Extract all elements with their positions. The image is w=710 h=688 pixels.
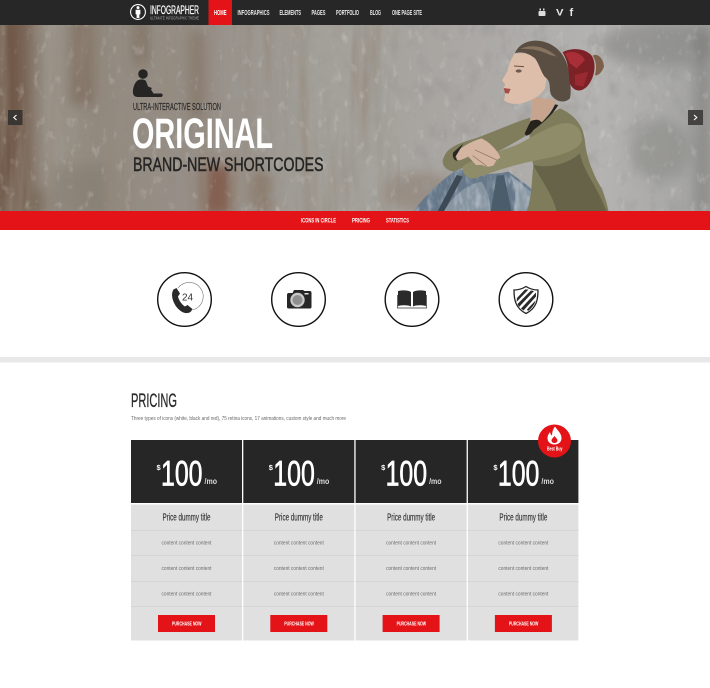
purchase button: PURCHASE NOW — [509, 622, 539, 628]
price: 100 — [386, 454, 427, 494]
logo tagline: ULTIMATE INFOGRAPHIC THEME — [150, 16, 199, 20]
hero left arrow — [8, 110, 22, 125]
plan title: Price dummy title — [275, 512, 323, 524]
pricing table column 3 — [356, 440, 467, 640]
price: $ — [381, 463, 386, 472]
purchase button: PURCHASE NOW — [284, 622, 314, 628]
rows — [356, 530, 467, 607]
pricing table column 4 — [468, 440, 578, 640]
price: $ — [269, 463, 274, 472]
icon: open book — [385, 273, 439, 326]
necklace — [525, 104, 558, 136]
icon: youtube — [538, 8, 546, 16]
rows: content content content — [386, 540, 437, 546]
concrete wall background — [0, 20, 710, 215]
icon: phone 24 hours: 24 — [182, 292, 194, 304]
best buy badge — [538, 424, 571, 458]
rows: content content content — [498, 566, 549, 572]
price: /mo — [541, 477, 554, 486]
price: $ — [156, 463, 162, 472]
purchase button — [158, 615, 215, 632]
rows: content content content — [498, 592, 549, 598]
nav links: INFOGRAPHICS — [238, 10, 270, 17]
nav links: BLOG — [370, 10, 381, 17]
badge label: Best Buy — [547, 446, 563, 452]
nav links: PORTFOLIO — [336, 10, 359, 17]
pricing heading: PRICING — [131, 391, 177, 412]
red section menu — [0, 211, 710, 230]
icon: phone 24 hours — [158, 273, 211, 326]
pricing table column 2 — [243, 440, 354, 640]
hero subtitle: BRAND-NEW SHORTCODES — [133, 154, 324, 176]
icon: vimeo: V — [556, 8, 564, 18]
red section menu: ICONS IN CIRCLE — [301, 218, 336, 224]
pricing description: Three types of icons (white, black and red), 75 retina icons, 17 animations, custom style and much more — [131, 416, 346, 422]
hair — [515, 41, 571, 101]
top navigation bar — [0, 0, 710, 25]
hero banner — [0, 20, 710, 215]
rows: content content content — [274, 566, 324, 572]
nav links: ELEMENTS — [280, 10, 301, 17]
rows: content content content — [274, 592, 324, 598]
purchase button: PURCHASE NOW — [397, 622, 426, 628]
icon: flame — [548, 426, 562, 444]
rows — [468, 530, 578, 607]
hero right arrow — [688, 110, 703, 125]
purchase button — [270, 615, 327, 632]
logo wordmark: INFOGRAPHER — [150, 3, 199, 17]
face — [502, 53, 548, 104]
rows: content content content — [386, 566, 437, 572]
rows: content content content — [162, 540, 212, 546]
rows: content content content — [162, 592, 212, 598]
rows: content content content — [386, 592, 437, 598]
hero icon: seated person — [133, 69, 163, 97]
back arm — [443, 118, 532, 172]
plan title: Price dummy title — [387, 512, 435, 524]
icon: striped shield — [499, 273, 553, 326]
rows — [243, 530, 354, 607]
price: /mo — [204, 477, 217, 486]
rows: content content content — [498, 540, 549, 546]
purchase button: PURCHASE NOW — [172, 622, 202, 628]
front arm — [463, 123, 582, 178]
nav links: PAGES — [312, 10, 326, 17]
hero title: ORIGINAL — [132, 110, 273, 158]
icon: facebook: f — [570, 7, 574, 19]
hero kicker: ULTRA-INTERACTIVE SOLUTION — [133, 102, 221, 113]
price: /mo — [317, 477, 329, 486]
nav links: ONE PAGE SITE — [392, 10, 422, 17]
red section menu: STATISTICS — [386, 218, 409, 224]
torso — [527, 108, 609, 212]
red section menu: PRICING — [352, 218, 370, 224]
icon: camera — [272, 273, 325, 326]
logo — [131, 3, 199, 20]
rows: content content content — [162, 566, 212, 572]
nav active tab — [208, 0, 232, 25]
price: 100 — [273, 454, 315, 494]
plan title: Price dummy title — [162, 512, 211, 524]
neck — [528, 97, 557, 127]
woman sitting — [413, 41, 609, 212]
purchase button — [383, 615, 440, 632]
price: 100 — [498, 454, 539, 494]
purchase button — [495, 615, 552, 632]
price: $ — [493, 463, 498, 472]
rows — [131, 530, 242, 607]
price: /mo — [429, 477, 442, 486]
nav active tab: HOME — [214, 10, 227, 17]
jeans — [414, 169, 532, 211]
nav links — [238, 10, 422, 17]
red scrunchie — [563, 49, 595, 90]
price: 100 — [161, 454, 202, 494]
pricing table column 1 — [131, 440, 242, 640]
logo icon — [131, 5, 145, 19]
section divider band — [0, 357, 710, 362]
plan title: Price dummy title — [499, 512, 548, 524]
rows: content content content — [274, 540, 324, 546]
hands — [455, 138, 500, 167]
